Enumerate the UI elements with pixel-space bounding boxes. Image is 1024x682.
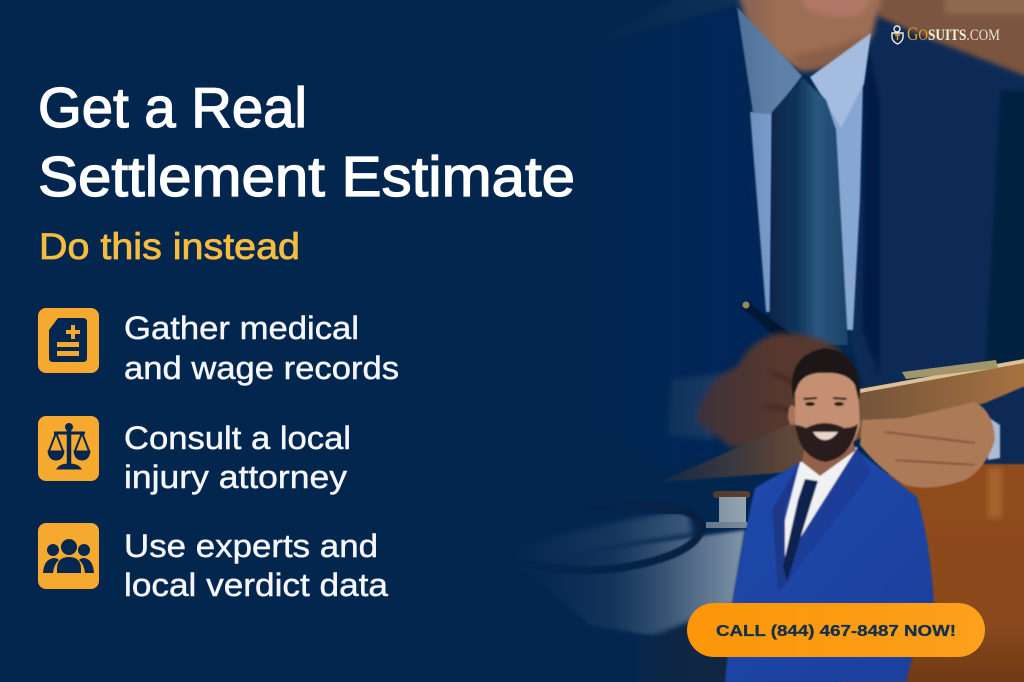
step text <box>124 528 388 603</box>
navy tie <box>783 479 818 582</box>
dark suit jacket <box>560 6 1024 470</box>
paper sheet <box>515 530 745 637</box>
step 3: experts and verdict data <box>38 523 388 603</box>
step text <box>124 310 399 386</box>
table streak <box>988 468 1002 518</box>
hair <box>792 348 860 402</box>
stethoscope <box>510 491 750 570</box>
neck <box>802 440 856 476</box>
wall backdrop <box>590 0 1024 82</box>
attorney portrait <box>725 348 934 682</box>
title: Settlement Estimate <box>38 145 575 209</box>
step text: injury attorney <box>124 459 347 495</box>
face and chin <box>737 0 884 72</box>
ears <box>788 405 796 425</box>
call to action button <box>687 603 985 657</box>
face <box>795 362 860 460</box>
title <box>38 76 575 209</box>
icon: scales of justice <box>38 416 99 481</box>
beard <box>795 423 858 462</box>
wooden table <box>840 464 1024 682</box>
call to action button: CALL (844) 467-8487 NOW! <box>716 623 956 640</box>
left hand and cuff <box>668 333 840 450</box>
step text <box>124 420 351 495</box>
dark tie <box>770 78 848 345</box>
eyes <box>803 397 847 406</box>
step text: Consult a local <box>124 420 351 456</box>
blue suit <box>725 450 934 682</box>
icon: group of people <box>38 523 99 589</box>
step 2: local injury attorney <box>38 416 351 495</box>
icon: padlock shield <box>892 26 903 44</box>
dark lower suit behind hands <box>840 395 1024 464</box>
blue shirt <box>737 7 871 330</box>
smile <box>813 432 838 440</box>
white shirt <box>785 447 860 567</box>
step text: Gather medical <box>124 310 359 346</box>
subtitle: Do this instead <box>39 226 300 267</box>
logo wordmark: GOSUITS.COM <box>907 24 1000 45</box>
step 1: medical and wage records <box>38 308 399 386</box>
icon: medical document <box>38 308 99 373</box>
logo: GoSuits.com <box>892 24 1000 45</box>
dark table corner <box>640 605 735 682</box>
pen <box>742 302 792 342</box>
left lapel <box>772 463 800 590</box>
step text: Use experts and <box>124 528 378 564</box>
right lapel <box>783 448 871 585</box>
title: Get a Real <box>38 76 307 140</box>
step text: local verdict data <box>124 567 388 603</box>
step text: and wage records <box>124 350 399 386</box>
photo: attorney signing clipboard <box>510 0 1024 682</box>
clipboard <box>660 359 1024 482</box>
right hand and cuff <box>860 402 1000 488</box>
